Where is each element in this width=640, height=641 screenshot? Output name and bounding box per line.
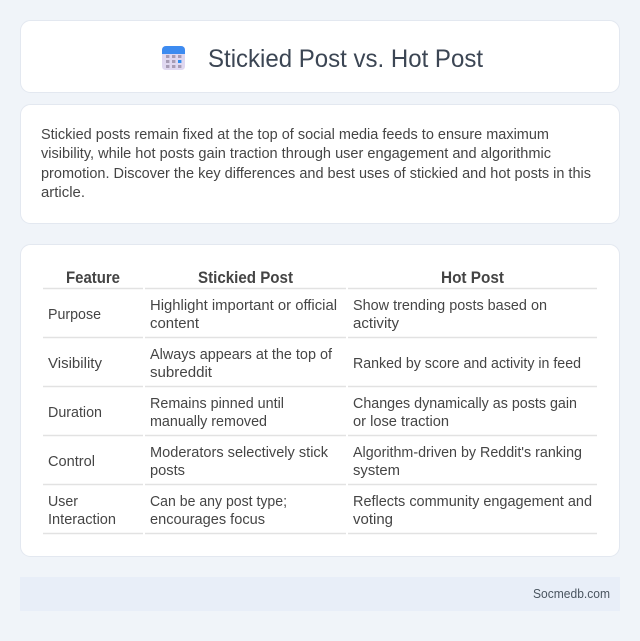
table row: User Interaction [48,494,592,528]
table row: Duration: Duration [48,405,102,421]
table header: Hot Post [441,269,504,287]
table row: User Interaction: encourages focus [150,512,265,528]
table row: User Interaction: Can be any post type; [150,494,287,510]
table row: Duration: manually removed [150,414,267,430]
table header [66,269,504,287]
footer: Socmedb.com [533,586,610,601]
panel: comparison table [20,244,620,556]
table row: Purpose [48,298,547,332]
table row: Control: system [353,463,400,479]
table row: Purpose: Purpose [48,307,101,323]
table row: Control: posts [150,463,185,479]
text block: introduction: Stickied posts remain fixed at the top of social media feeds to ensure maximum [41,127,549,143]
table row: Visibility [48,347,581,381]
table row: User Interaction: Interaction [48,512,116,528]
table row: User Interaction: Reflects community engagement and [353,494,592,510]
table row: User Interaction: voting [353,512,393,528]
table row: Duration: Remains pinned until [150,396,284,412]
table row: Duration: or lose traction [353,414,449,430]
title: Stickied Post vs. Hot Post [208,45,483,73]
text block: introduction [41,127,591,201]
text block: introduction: article. [41,185,85,201]
panel: title header [20,20,620,92]
table row: Visibility: Always appears at the top of [150,347,333,363]
text block: introduction: visibility, while hot posts gain traction through user engagement and algorithmic [41,146,552,162]
table row: Control: Control [48,454,95,470]
icon: calendar [162,46,185,70]
panel: introduction [20,104,620,224]
table row: Visibility: Visibility [48,356,103,372]
table row: Purpose: content [150,316,199,332]
table row: Control: Algorithm-driven by Reddit's ranking [353,445,582,461]
table row: User Interaction: User [48,494,78,510]
table row: Duration [48,396,577,430]
table row: Visibility: subreddit [150,365,212,381]
footer [20,577,620,611]
text block: introduction: promotion. Discover the key differences and best uses of stickied and hot posts in this [41,166,591,182]
table row: Control: Moderators selectively stick [150,445,329,461]
table header: Feature [66,269,120,287]
table row: Purpose: Highlight important or official [150,298,337,314]
table row: Duration: Changes dynamically as posts gain [353,396,577,412]
table header: Stickied Post [198,269,293,287]
table row: Purpose: activity [353,316,400,332]
table row: Visibility: Ranked by score and activity in feed [353,356,581,372]
table row: Purpose: Show trending posts based on [353,298,547,314]
table row: Control [48,445,582,479]
